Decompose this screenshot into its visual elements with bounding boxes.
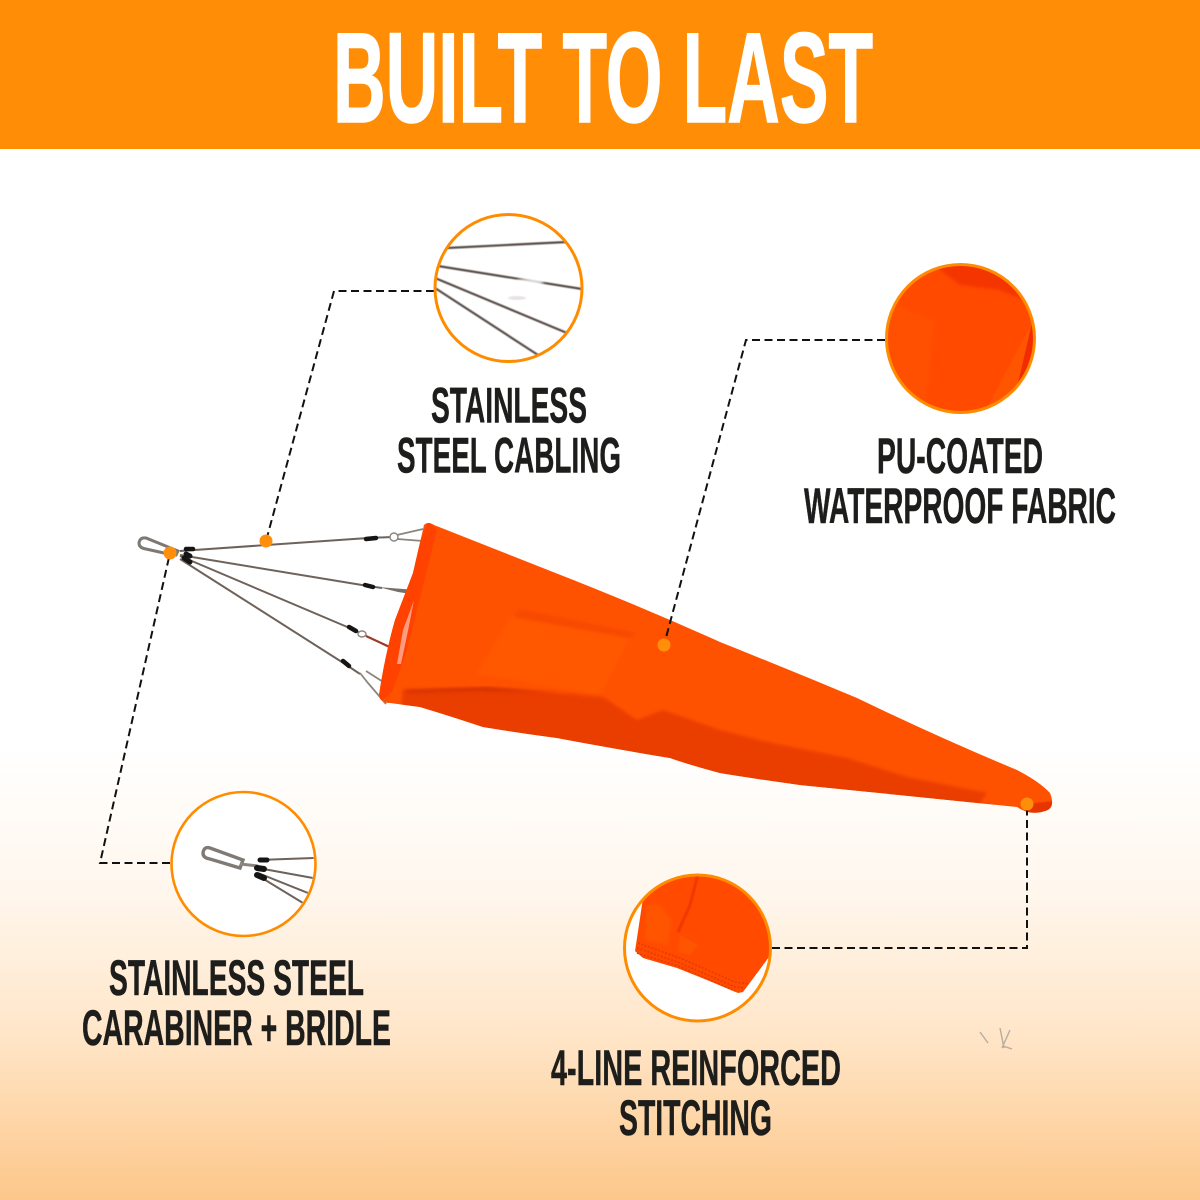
anchor dot: cabling: [260, 534, 272, 548]
inner mouth of windsock: [376, 521, 437, 704]
label: stainless steel carabiner and bridle: CARABINER + BRIDLE: [82, 1000, 391, 1056]
label: stainless steel cabling: [397, 378, 621, 484]
label: stainless steel cabling: STAINLESS: [431, 378, 587, 434]
anchor dot: carabiner: [164, 546, 176, 560]
label: PU-coated waterproof fabric: [804, 428, 1116, 534]
label: 4-line reinforced stitching: STITCHING: [619, 1090, 772, 1146]
detail circle: PU-coated fabric: [885, 262, 1042, 420]
stray mark near lower right: [980, 1028, 1012, 1049]
anchor dot: stitching: [1020, 798, 1034, 810]
windsock product illustration: [139, 521, 1054, 816]
leader line: stitching: [772, 804, 1027, 948]
windsock body: [379, 523, 1052, 813]
carabiner: [139, 538, 178, 555]
label: stainless steel carabiner and bridle: STAINLESS STEEL: [109, 950, 364, 1006]
title banner: [0, 0, 1200, 150]
leader line: cabling: [266, 291, 434, 541]
label: PU-coated waterproof fabric: PU-COATED: [877, 428, 1043, 484]
label: 4-line reinforced stitching: [551, 1040, 841, 1146]
fabric fold shading: [477, 615, 630, 695]
detail circle: carabiner and bridle: [172, 792, 316, 936]
detail circle: reinforced stitching: [624, 868, 780, 1021]
leader line: fabric: [664, 340, 885, 645]
lower shadow band: [400, 690, 995, 805]
label: stainless steel carabiner and bridle: [82, 950, 391, 1056]
label: stainless steel cabling: STEEL CABLING: [397, 428, 621, 484]
detail circle: stainless steel cabling: [435, 214, 582, 362]
leader line: carabiner: [100, 553, 170, 863]
anchor dot: fabric: [658, 638, 670, 652]
tip shadow: [1020, 800, 1052, 813]
label: 4-line reinforced stitching: 4-LINE REINFORCED: [551, 1040, 841, 1096]
bridle cables: [180, 529, 434, 704]
